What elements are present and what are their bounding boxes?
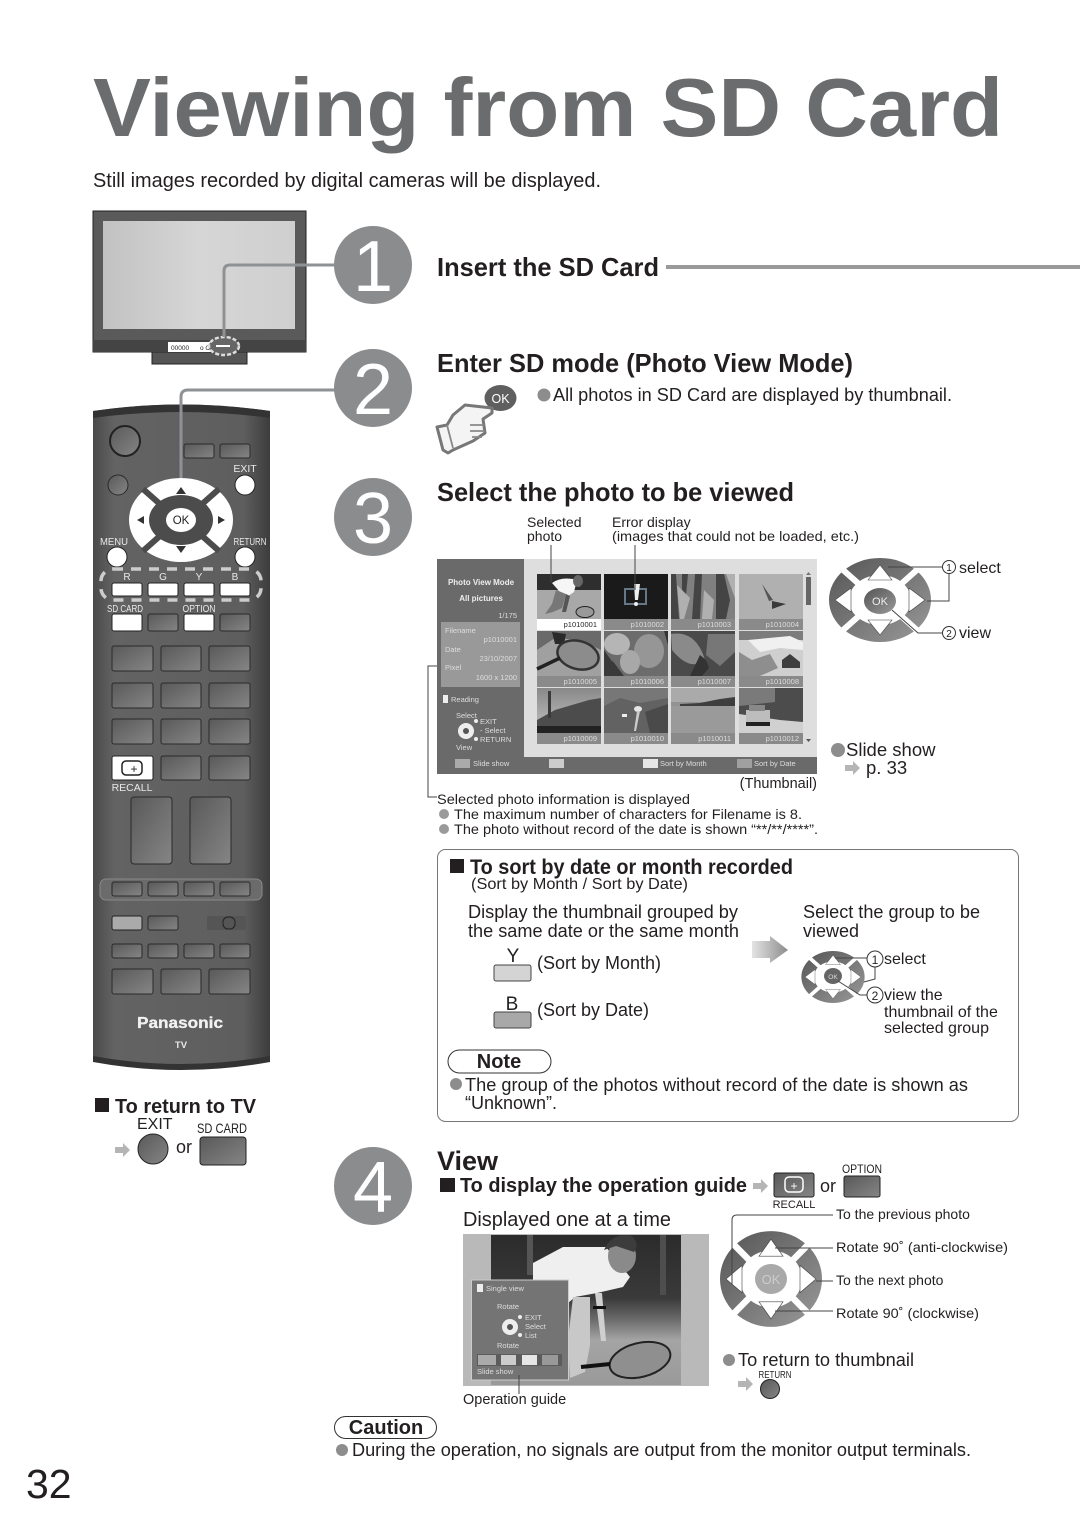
- screen side panel: View: [456, 743, 473, 752]
- step number 1: 1: [353, 227, 393, 307]
- arrow: [752, 936, 788, 963]
- B button sort by date: (Sort by Date): [537, 1000, 649, 1020]
- operation guide heading: RECALL: [773, 1199, 815, 1211]
- navigation pad: select and view: [829, 558, 1001, 642]
- B button sort by date: [494, 994, 649, 1028]
- Y button sort by month: Y: [507, 946, 520, 967]
- navigation pad with rotate labels: [720, 1206, 1008, 1327]
- thumbnail 1 selected: p1010001: [564, 620, 597, 629]
- thumbnail 12: [739, 688, 803, 744]
- title: Viewing from SD Card: [93, 61, 1003, 154]
- thumbnail 2 error: [604, 574, 668, 630]
- sort instructions left: the same date or the same month: [468, 921, 739, 941]
- remote control: Y: [196, 572, 203, 583]
- screen side panel: [437, 559, 524, 757]
- small navigation pad: 2: [872, 989, 879, 1003]
- operation guide overlay: List: [525, 1331, 538, 1340]
- screen side panel: 1600 x 1200: [476, 673, 517, 682]
- note text: “Unknown”.: [465, 1093, 557, 1113]
- step number 3: [334, 478, 412, 559]
- screen bottom bar: Slide show: [473, 759, 510, 768]
- operation guide overlay: Select: [525, 1322, 547, 1331]
- thumbnail 3: p1010003: [698, 620, 731, 629]
- step number 4: 4: [353, 1148, 393, 1228]
- thumbnail 5: [537, 631, 602, 687]
- sort instructions left: Display the thumbnail grouped by: [468, 902, 738, 922]
- screen side panel: Reading: [451, 695, 479, 704]
- Y button sort by month: (Sort by Month): [537, 953, 661, 973]
- screen side panel: Photo View Mode: [448, 578, 515, 587]
- label: error display: (images that could not be loaded, etc.): [612, 528, 859, 544]
- label: error display: Error display: [612, 514, 691, 530]
- to return to TV: EXIT: [137, 1116, 173, 1133]
- navigation pad with rotate labels: To the next photo: [836, 1272, 944, 1288]
- screen bottom bar: [437, 757, 817, 774]
- remote control: OPTION: [182, 604, 216, 615]
- note text: [450, 1075, 968, 1113]
- remote control: RECALL: [112, 782, 153, 794]
- thumbnail 9: p1010009: [564, 734, 597, 743]
- operation guide overlay: Slide show: [477, 1367, 514, 1376]
- label: error display: [612, 514, 859, 544]
- callout lines to thumbnails: [428, 545, 635, 797]
- label: operation guide: [463, 1375, 566, 1408]
- subtitle: Still images recorded by digital cameras will be displayed.: [93, 169, 601, 192]
- sort heading: To sort by date or month recorded: [470, 856, 793, 879]
- step number 4: [334, 1147, 412, 1228]
- icon: hand pressing OK: OK: [491, 392, 510, 406]
- thumbnail 7: p1010007: [698, 677, 731, 686]
- to return to TV: SD CARD: [197, 1120, 247, 1136]
- sort instructions right: viewed: [803, 921, 859, 941]
- thumbnail 10: p1010010: [631, 734, 664, 743]
- thumbnail 1 selected: [537, 574, 601, 630]
- thumbnail 6: p1010006: [631, 677, 664, 686]
- remote control: [93, 404, 270, 1070]
- note pill: Note: [477, 1051, 521, 1073]
- step number 1: [334, 226, 412, 307]
- remote control: Panasonic: [137, 1015, 223, 1032]
- step number 2: 2: [353, 350, 393, 430]
- remote control: SD CARD: [107, 604, 143, 615]
- thumbnail 7: [671, 631, 735, 687]
- screen bottom bar: Sort by Date: [754, 759, 796, 768]
- thumbnail 11: [671, 688, 735, 744]
- operation guide heading: OPTION: [842, 1162, 882, 1176]
- thumbnail 5: p1010005: [564, 677, 597, 686]
- heading: select photo: Select the photo to be viewed: [437, 477, 794, 507]
- thumbnail screen: [437, 559, 817, 774]
- label: displayed one at a time: Displayed one at a time: [463, 1209, 671, 1231]
- caution pill: Caution: [349, 1417, 423, 1439]
- navigation pad: select and view: view: [959, 625, 991, 642]
- operation guide heading: +: [790, 1179, 798, 1193]
- note pill: [448, 1050, 551, 1073]
- sort instructions right: [803, 902, 980, 941]
- TV illustration: 00000: [171, 345, 189, 352]
- single photo view: [463, 1234, 709, 1386]
- thumbnail 4: [739, 574, 803, 630]
- sort instructions right: Select the group to be: [803, 902, 980, 922]
- to return to thumbnail: To return to thumbnail: [738, 1349, 914, 1370]
- to return to TV: To return to TV: [115, 1096, 257, 1118]
- screen side panel: RETURN: [480, 735, 511, 744]
- thumbnail 2 error: p1010002: [631, 620, 664, 629]
- small navigation pad: view the: [884, 987, 943, 1004]
- thumbnail 11: p1010011: [698, 734, 731, 743]
- TV illustration: o On: [200, 345, 214, 352]
- thumbnail 4: p1010004: [766, 620, 799, 629]
- thumbnail 10: [604, 688, 668, 744]
- operation guide overlay: EXIT: [525, 1313, 542, 1322]
- to return to TV: or: [176, 1137, 192, 1157]
- remote control: OK: [173, 515, 190, 527]
- navigation pad: select and view: 2: [946, 629, 952, 640]
- label: selected photo: [527, 514, 581, 544]
- remote control: G: [159, 572, 167, 583]
- small navigation pad: select: [884, 951, 926, 968]
- remote control: RETURN: [234, 537, 266, 548]
- remote control: MENU: [100, 537, 128, 548]
- caution text: During the operation, no signals are output from the monitor output terminals.: [352, 1440, 971, 1460]
- connector lines from steps: [181, 265, 335, 478]
- remote control: B: [232, 572, 239, 583]
- sort instructions left: [468, 902, 739, 941]
- note text: The group of the photos without record of the date is shown as: [465, 1075, 968, 1095]
- heading: enter SD mode: Enter SD mode (Photo View Mode): [437, 348, 853, 378]
- scrollbar: [806, 572, 811, 742]
- label: selected photo: Selected: [527, 514, 581, 530]
- operation guide overlay: Rotate: [497, 1302, 519, 1311]
- remote control: EXIT: [233, 463, 257, 475]
- heading: insert the SD card: [437, 252, 1080, 282]
- photo information notes: Selected photo information is displayed: [437, 791, 690, 807]
- small navigation pad: thumbnail of the: [884, 1004, 998, 1021]
- small navigation pad: OK: [828, 974, 838, 981]
- step number 3: 3: [353, 479, 393, 559]
- heading: view: View: [437, 1146, 499, 1176]
- to return to thumbnail: [723, 1349, 914, 1398]
- TV illustration: [93, 211, 306, 364]
- thumbnail 8: [739, 631, 803, 687]
- screen side panel: EXIT: [480, 717, 497, 726]
- panel: sort by date or month: [438, 850, 1018, 1122]
- thumbnail 9: [537, 688, 601, 744]
- page number: 32: [26, 1461, 72, 1507]
- screen side panel: 23/10/2007: [479, 654, 517, 663]
- heading: insert the SD card: Insert the SD Card: [437, 252, 659, 282]
- navigation pad with rotate labels: Rotate 90˚ (anti-clockwise): [836, 1239, 1008, 1255]
- operation guide heading: [440, 1162, 882, 1211]
- screen side panel: Pixel: [445, 663, 462, 672]
- screen side panel: 1/175: [498, 611, 517, 620]
- sort subheading: (Sort by Month / Sort by Date): [471, 876, 688, 893]
- remote control: +: [130, 762, 138, 776]
- small navigation pad: selected group: [884, 1020, 989, 1037]
- screen side panel: Select: [456, 711, 478, 720]
- slide show reference: p. 33: [866, 757, 907, 778]
- thumbnail 3: [671, 574, 735, 630]
- B button sort by date: B: [506, 994, 518, 1015]
- label: selected photo: photo: [527, 528, 562, 544]
- navigation pad: select and view: OK: [872, 596, 889, 608]
- power button: [110, 426, 140, 456]
- navigation pad with rotate labels: Rotate 90˚ (clockwise): [836, 1305, 979, 1321]
- screen side panel: All pictures: [459, 594, 503, 603]
- navigation pad with rotate labels: OK: [762, 1272, 781, 1287]
- operation guide overlay: Single view: [486, 1284, 525, 1293]
- navigation pad: select and view: select: [959, 560, 1001, 577]
- icon: hand pressing OK: [437, 385, 516, 453]
- slide show reference: Slide show: [846, 739, 936, 760]
- slide show reference: [831, 739, 936, 778]
- photo information notes: [437, 791, 818, 837]
- thumbnail 8: p1010008: [766, 677, 799, 686]
- small navigation pad: [801, 951, 998, 1037]
- remote navigation pad: [129, 478, 233, 562]
- screen side panel: - Select: [480, 726, 506, 735]
- operation guide heading: or: [820, 1176, 836, 1196]
- screen side panel: Date: [445, 645, 461, 654]
- operation guide heading: To display the operation guide: [460, 1174, 747, 1197]
- navigation pad with rotate labels: To the previous photo: [836, 1206, 970, 1222]
- remote control: R: [123, 572, 131, 583]
- thumbnail 12: p1010012: [766, 734, 799, 743]
- label: thumbnail: (Thumbnail): [740, 776, 817, 792]
- to return to TV: [95, 1096, 257, 1165]
- to return to thumbnail: RETURN: [758, 1369, 792, 1381]
- step number 2: [334, 349, 412, 430]
- screen side panel: Filename: [445, 626, 476, 635]
- Y button sort by month: [494, 946, 661, 981]
- text: thumbnails note: All photos in SD Card are displayed by thumbnail.: [553, 385, 952, 405]
- small navigation pad: 1: [872, 953, 879, 967]
- label: operation guide: Operation guide: [463, 1392, 566, 1408]
- remote control: TV: [175, 1040, 188, 1051]
- photo information notes: The maximum number of characters for Filename is 8.: [454, 806, 802, 822]
- photo information notes: The photo without record of the date is shown “**/**/****”.: [454, 821, 818, 837]
- navigation pad: select and view: 1: [946, 563, 952, 574]
- screen side panel: p1010001: [484, 635, 517, 644]
- thumbnail 6: [604, 631, 668, 687]
- screen bottom bar: Sort by Month: [660, 759, 707, 768]
- operation guide overlay: [472, 1280, 568, 1380]
- operation guide overlay: Rotate: [497, 1341, 519, 1350]
